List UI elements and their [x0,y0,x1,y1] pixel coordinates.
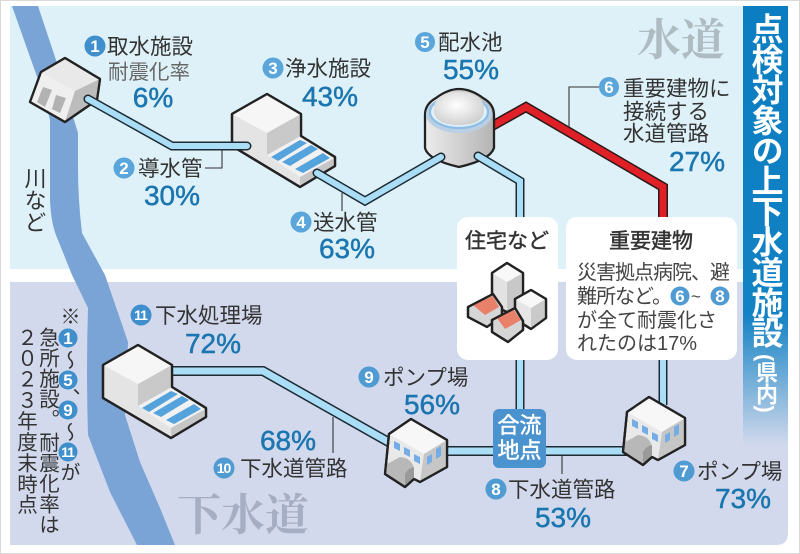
label: 3 water treatment: 浄水施設 [285,57,371,81]
icon: intake facility 1 [30,58,100,122]
note: vertical footnote: 11 [61,444,75,460]
river [12,6,175,545]
label: 3 water treatment [262,57,371,112]
label: 10 sewer pipe: 下水道管路 [240,457,348,481]
callout: confluence point [493,409,546,468]
label: 1 intake facility: 1 [90,37,100,56]
panel: homes [457,217,558,360]
note: vertical footnote: ～ [57,422,79,442]
note: vertical footnote: が [57,462,79,482]
label: 9 pump station: 9 [364,368,374,387]
label: 1 intake facility: 耐震化率 [108,61,190,84]
label: 10 sewer pipe: 68% [260,425,316,456]
text: important buildings description: が全て耐震化さ [577,309,717,332]
icon: pump station 7 [623,397,685,465]
banner title: 点検対象の上下水道施設 [748,12,784,349]
label: 11 sewage plant: 72% [185,328,241,359]
label: 4 transmission pipe: 4 [296,213,306,232]
label: 3 water treatment: 43% [302,81,358,112]
icon: house cluster [468,263,546,342]
label: 1 intake facility: 6% [133,82,173,113]
note: vertical footnote: 急所施設。 [36,327,60,430]
banner title: (県内) [753,354,778,413]
label: 9 pump station [358,366,468,420]
label: 1 intake facility [84,35,193,113]
watermark: water supply: 水道 [637,16,725,65]
label: 10 sewer pipe: 10 [217,460,231,476]
icon: pump station 9 [385,419,447,487]
label: 7 pump station [674,460,782,514]
heading: important buildings: 重要建物 [609,230,693,253]
banner title [743,6,788,446]
callout: confluence point: 地点 [497,438,542,463]
label: 8 sewer pipe: 下水道管路 [508,478,616,502]
text: important buildings description: 8 [715,287,725,306]
label: 9 pump station: 56% [404,389,460,420]
pipe: transmission pipe 4 [317,157,441,201]
label: 8 sewer pipe [486,478,616,533]
note: vertical footnote: ～ [57,350,79,370]
leader lines [205,87,599,474]
icon: sewage treatment plant 11 [103,345,206,438]
label: 6 pipes to important buildings: 6 [604,78,614,97]
note: vertical footnote: 耐震化率は [36,432,60,534]
callout: confluence point: 合流 [497,413,542,438]
label: 6 pipes to important buildings: 接続する [623,100,709,124]
label: 11 sewage plant [130,304,263,359]
label: river: 川など [22,167,46,233]
note: vertical footnote: 1 [63,329,73,348]
pipe: sewer pipe 10 [170,371,392,444]
label: 7 pump station: ポンプ場 [697,460,782,484]
label: 11 sewage plant: 下水処理場 [155,304,263,328]
label: 6 pipes to important buildings: 重要建物に [623,77,731,101]
label: 2 conveyance pipe: 30% [144,180,200,211]
note: vertical footnote [14,306,79,534]
label: 5 reservoir: 配水池 [438,31,503,55]
panel: important buildings [566,217,737,360]
label: 6 pipes to important buildings: 27% [669,146,725,177]
panel: water supply background [10,6,743,269]
text: important buildings description [577,261,730,355]
text: important buildings description: ~ [691,287,701,306]
label: 7 pump station: 73% [715,483,771,514]
label: 4 transmission pipe [290,211,378,264]
label: 2 conveyance pipe: 導水管 [138,157,203,181]
text: important buildings description: 難所など。 [577,285,671,308]
note: vertical footnote: 、 [57,388,79,408]
pipe: sewer pipe 8 [440,446,630,456]
label: 1 intake facility: 取水施設 [107,35,193,59]
label: 5 reservoir [415,31,503,85]
pipe: red important-building pipe 6 [485,107,663,225]
label: 11 sewage plant: 11 [134,307,148,323]
label: 4 transmission pipe: 送水管 [313,211,378,235]
label: 2 conveyance pipe [114,157,203,211]
note: vertical footnote: ※ [57,306,79,326]
note: vertical footnote: 5 [63,371,73,390]
label: 3 water treatment: 3 [268,59,278,78]
watermark: sewerage: 下水道 [177,491,309,540]
label: 8 sewer pipe: 53% [535,502,591,533]
pipe: conveyance pipe 2 [88,99,247,146]
pipe: distribution to homes [478,156,520,420]
text: important buildings description: れたのは17% [577,333,697,355]
label: 5 reservoir: 5 [420,33,430,52]
label: 6 pipes to important buildings: 水道管路 [623,122,709,146]
note: vertical footnote: ２０２３年度末時点 [14,327,38,515]
label: 4 transmission pipe: 63% [319,233,375,264]
label: 5 reservoir: 55% [443,54,499,85]
label: 8 sewer pipe: 8 [491,480,501,499]
icon: distribution reservoir 5 [425,89,494,167]
pipe: sewer from important building [658,350,668,405]
heading: homes: 住宅など [465,230,549,253]
label: 9 pump station: ポンプ場 [383,366,468,390]
text: important buildings description: 災害拠点病院、避 [577,261,730,284]
text: important buildings description: 6 [675,287,685,306]
label: 2 conveyance pipe: 2 [119,159,129,178]
note: vertical footnote: 9 [63,401,73,420]
icon: water treatment facility 3 [232,94,335,187]
panel: sewerage background [10,282,788,545]
label: 6 pipes to important buildings [599,77,731,177]
label: 10 sewer pipe [214,425,348,481]
label: 7 pump station: 7 [679,462,689,481]
